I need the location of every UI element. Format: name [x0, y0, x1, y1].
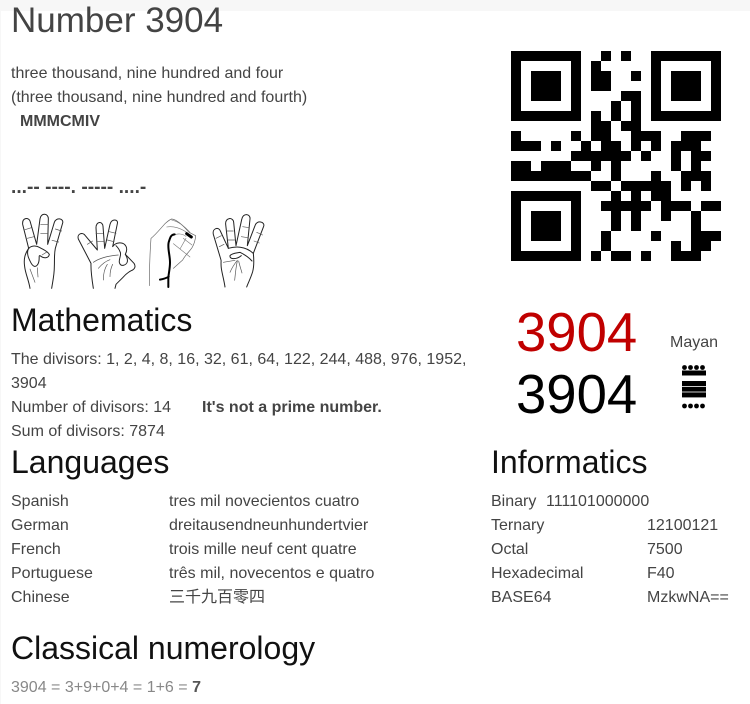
octal row: Octal [491, 541, 528, 558]
hand: three [23, 214, 63, 288]
german row [11, 517, 368, 534]
morse code: ...-- ----. ----- ....- [11, 177, 146, 198]
languages table [11, 493, 374, 606]
number names text block [11, 65, 307, 130]
spanish row [11, 493, 359, 510]
french row: French [11, 541, 61, 558]
hand: nine [78, 220, 135, 288]
german row: dreitausendneunhundertvier [169, 517, 368, 534]
base64 row: MzkwNA== [647, 589, 729, 606]
ternary row: 12100121 [647, 517, 718, 534]
sum of divisors: Sum of divisors: 7874 [11, 423, 165, 440]
french row: trois mille neuf cent quatre [169, 541, 357, 558]
octal row [491, 541, 683, 558]
large black number: 3904 [516, 364, 637, 425]
chinese row: 三千九百零四 [169, 589, 265, 606]
binary row: 111101000000 [546, 493, 649, 510]
heading: classical numerology: Classical numerology [11, 630, 315, 666]
chinese row: Chinese [11, 589, 70, 606]
ternary row [491, 517, 718, 534]
icon: sign language hands [22, 214, 264, 289]
icon: mayan numeral [682, 365, 706, 408]
base64 row: BASE64 [491, 589, 551, 606]
hexadecimal row: Hexadecimal [491, 565, 583, 582]
cardinal name: three thousand, nine hundred and four [11, 65, 283, 82]
mathematics text block [11, 351, 466, 440]
spanish row: tres mil novecientos cuatro [169, 493, 359, 510]
base64 row [491, 589, 729, 606]
title: Number 3904 [11, 1, 223, 40]
binary row [491, 493, 649, 510]
large red number: 3904 [516, 302, 637, 363]
german row: German [11, 517, 69, 534]
divisors: The divisors: 1, 2, 4, 8, 16, 32, 61, 64, 122, 244, 488, 976, 1952, [11, 351, 466, 368]
octal row: 7500 [647, 541, 683, 558]
divisors continued: 3904 [11, 375, 47, 392]
number of divisors: Number of divisors: 14 [11, 399, 171, 416]
heading: informatics: Informatics [491, 444, 647, 480]
left edge line [0, 11, 1, 704]
portuguese row: três mil, novecentos e quatro [169, 565, 374, 582]
top bar [0, 0, 750, 11]
qr data modules [511, 51, 721, 261]
portuguese row: Portuguese [11, 565, 93, 582]
ternary row: Ternary [491, 517, 544, 534]
hexadecimal row: F40 [647, 565, 675, 582]
ordinal name: (three thousand, nine hundred and fourth) [11, 89, 307, 106]
mayan label: Mayan [670, 334, 718, 351]
heading: mathematics: Mathematics [11, 302, 192, 338]
heading: languages: Languages [11, 444, 169, 480]
numerology calculation: 3904 = 3+9+0+4 = 1+6 = 7 [11, 679, 201, 696]
roman numeral: MMMCMIV [20, 113, 100, 130]
hexadecimal row [491, 565, 675, 582]
spanish row: Spanish [11, 493, 69, 510]
french row [11, 541, 357, 558]
informatics table [491, 493, 729, 606]
hand: zero [149, 219, 196, 287]
portuguese row [11, 565, 374, 582]
binary row: Binary [491, 493, 536, 510]
qr code [511, 51, 721, 261]
qr finder patterns [511, 51, 721, 261]
prime note: It's not a prime number. [202, 399, 382, 416]
chinese row [11, 588, 265, 606]
hand: four [213, 215, 264, 287]
